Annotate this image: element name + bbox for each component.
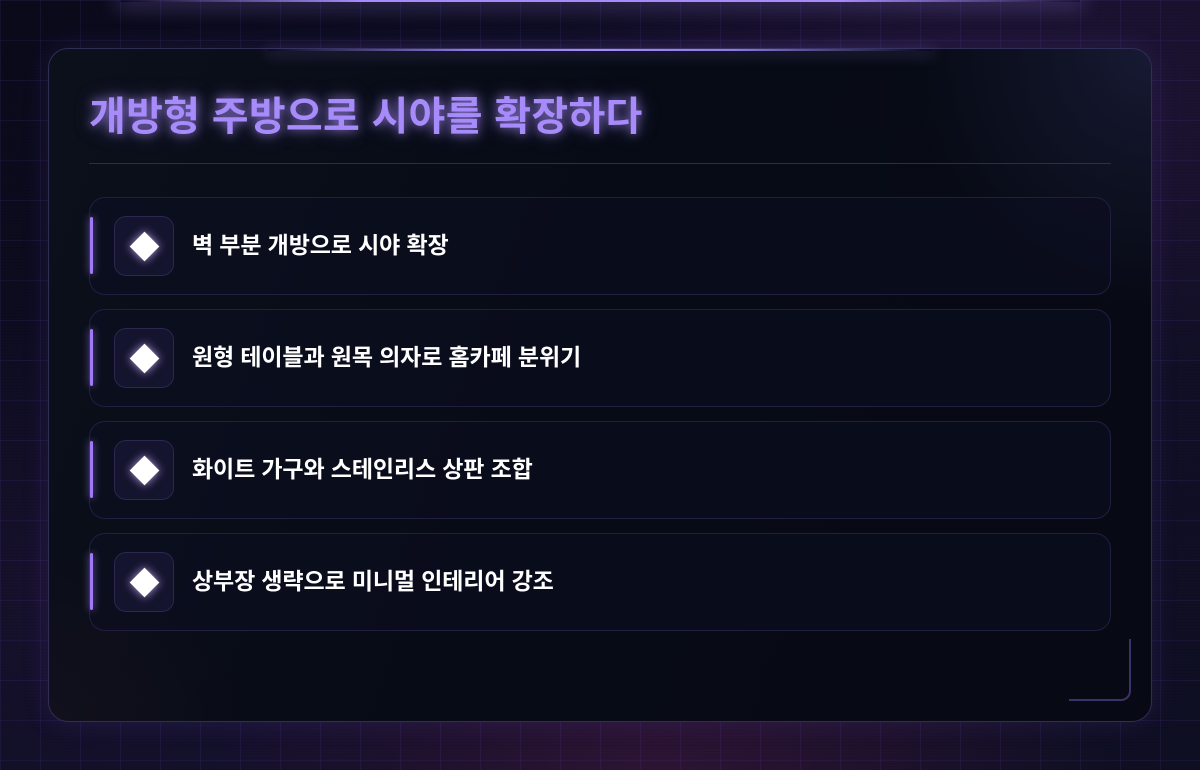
item 2 text: 원형 테이블과 원목 의자로 홈카페 분위기 (192, 344, 581, 370)
list item 3 (89, 421, 1111, 519)
list item 2 (89, 309, 1111, 407)
icon: diamond 4 (114, 552, 174, 612)
title: 개방형 주방으로 시야를 확장하다 (89, 95, 643, 139)
top glow bar (120, 0, 1080, 2)
list item 1 (89, 197, 1111, 295)
list item 4 (89, 533, 1111, 631)
item 3 text: 화이트 가구와 스테인리스 상판 조합 (192, 456, 533, 482)
icon: diamond 2 (114, 328, 174, 388)
card top accent bar (268, 49, 932, 51)
item 1 accent bar (90, 217, 93, 274)
item 2 accent bar (90, 329, 93, 386)
corner bracket (1069, 639, 1131, 701)
icon: diamond 3 (114, 440, 174, 500)
item 1 text: 벽 부분 개방으로 시야 확장 (192, 232, 449, 258)
item 3 accent bar (90, 441, 93, 498)
icon: diamond 1 (114, 216, 174, 276)
item 4 accent bar (90, 553, 93, 610)
item 4 text: 상부장 생략으로 미니멀 인테리어 강조 (192, 568, 554, 594)
